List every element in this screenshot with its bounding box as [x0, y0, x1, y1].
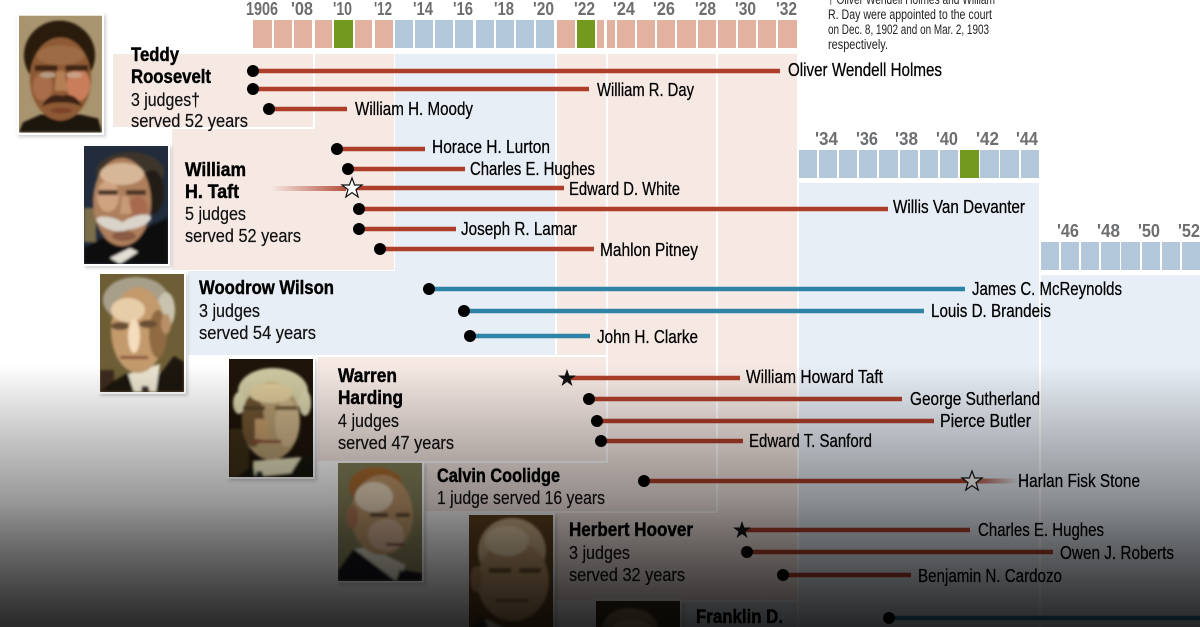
timelines: Taft appointees: Charles E. Hughes	[470, 159, 595, 179]
president text: William H. Taft	[185, 160, 301, 246]
president text: William H. Taft: 5 judges	[185, 204, 246, 224]
timelines: Roosevelt appointees: William H. Moody	[355, 99, 473, 119]
president text: Herbert Hoover	[569, 520, 694, 585]
timelines: Taft appointees: Mahlon Pitney	[600, 240, 698, 260]
timelines: Hoover appointees: Charles E. Hughes	[978, 520, 1104, 540]
timelines: Taft appointees: Edward D. White	[569, 179, 680, 199]
portrait: Woodrow Wilson	[98, 272, 188, 396]
president text: Woodrow Wilson: served 54 years	[199, 323, 316, 343]
timelines: Roosevelt appointees: William R. Day	[597, 80, 694, 100]
year strip 1934 to 1944: '40	[936, 129, 958, 149]
president text: Teddy Roosevelt: Teddy	[131, 45, 179, 66]
president text: Herbert Hoover: served 32 years	[569, 565, 685, 585]
dark fade overlay at bottom	[0, 365, 1200, 627]
portrait: William H. Taft	[83, 145, 172, 268]
footnote: R. Day were appointed to the court	[828, 7, 992, 22]
timelines: Harding appointees: Edward T. Sanford	[749, 431, 872, 451]
timelines: Taft appointees: Willis Van Devanter	[893, 197, 1025, 217]
timelines: Harding appointees	[558, 367, 1040, 451]
president text: Warren Harding: Warren	[338, 366, 397, 387]
year strip 1934 to 1944: '42	[976, 129, 999, 149]
timelines: Roosevelt appointees	[247, 60, 942, 119]
portrait: Herbert Hoover	[467, 513, 557, 627]
president text: Teddy Roosevelt: served 52 years	[131, 111, 248, 131]
president text: Warren Harding: served 47 years	[338, 433, 454, 453]
timelines: Roosevelt appointees: Oliver Wendell Holmes	[788, 60, 942, 80]
president text: Warren Harding: 4 judges	[338, 411, 399, 431]
year strip 1934 to 1944: '36	[856, 129, 878, 149]
timelines: Wilson appointees: John H. Clarke	[597, 327, 698, 347]
president text: Calvin Coolidge: Calvin Coolidge	[437, 466, 560, 487]
timeline: Coolidge appointee: Harlan Fisk Stone	[1018, 471, 1140, 491]
president text: Woodrow Wilson	[199, 278, 334, 343]
timelines: Wilson appointees: Louis D. Brandeis	[931, 301, 1051, 321]
year strip 1946 to 1952: '48	[1097, 221, 1120, 241]
portrait: Calvin Coolidge	[336, 461, 426, 585]
timelines: Wilson appointees: James C. McReynolds	[972, 279, 1122, 299]
portrait: Warren Harding	[227, 357, 317, 481]
portrait: Teddy Roosevelt	[17, 13, 106, 137]
year strip 1946 to 1952	[1041, 221, 1200, 270]
president text: Calvin Coolidge	[437, 466, 605, 508]
timelines: Taft appointees	[270, 137, 1025, 260]
footnote	[828, 0, 995, 52]
president text: William H. Taft: William	[185, 160, 246, 181]
year strip 1906 to 1932	[246, 0, 797, 48]
president text: Herbert Hoover: 3 judges	[569, 543, 630, 563]
president text: William H. Taft: served 52 years	[185, 226, 301, 246]
timelines: Hoover appointees	[733, 520, 1174, 586]
president text: Teddy Roosevelt: Roosevelt	[131, 67, 212, 88]
president text: William H. Taft: H. Taft	[185, 182, 240, 203]
timelines: Harding appointees: George Sutherland	[910, 389, 1040, 409]
timelines: Harding appointees: William Howard Taft	[746, 367, 883, 387]
president text: Herbert Hoover: Herbert Hoover	[569, 520, 694, 541]
president text: Woodrow Wilson: Woodrow Wilson	[199, 278, 334, 299]
president text: Woodrow Wilson: 3 judges	[199, 301, 260, 321]
president text: Calvin Coolidge: 1 judge served 16 years	[437, 488, 605, 508]
year strip 1946 to 1952: '46	[1057, 221, 1079, 241]
portrait: Franklin D. Roosevelt	[594, 599, 684, 627]
president text: Teddy Roosevelt: 3 judges†	[131, 90, 200, 110]
timeline: Franklin D. Roosevelt appointee	[883, 612, 1200, 624]
year strip 1934 to 1944: '38	[895, 129, 918, 149]
year strip 1946 to 1952: '50	[1138, 221, 1160, 241]
timelines: Taft appointees: Horace H. Lurton	[432, 137, 550, 157]
footnote: respectively.	[828, 37, 888, 52]
timeline: Coolidge appointee	[638, 471, 1140, 491]
president text: Warren Harding	[338, 366, 454, 453]
president text: Teddy Roosevelt	[131, 45, 248, 131]
timelines: Harding appointees: Pierce Butler	[940, 411, 1031, 431]
footnote: on Dec. 8, 1902 and on Mar. 2, 1903	[828, 22, 989, 37]
timelines: Hoover appointees: Benjamin N. Cardozo	[918, 566, 1062, 586]
president text: Warren Harding: Harding	[338, 388, 403, 409]
year strip 1934 to 1944: '44	[1016, 129, 1038, 149]
timelines: Taft appointees: Joseph R. Lamar	[461, 219, 577, 239]
year strip 1934 to 1944: '34	[815, 129, 838, 149]
year strip 1934 to 1944	[799, 129, 1039, 178]
timelines: Hoover appointees: Owen J. Roberts	[1060, 543, 1174, 563]
timelines: Wilson appointees	[423, 279, 1122, 347]
